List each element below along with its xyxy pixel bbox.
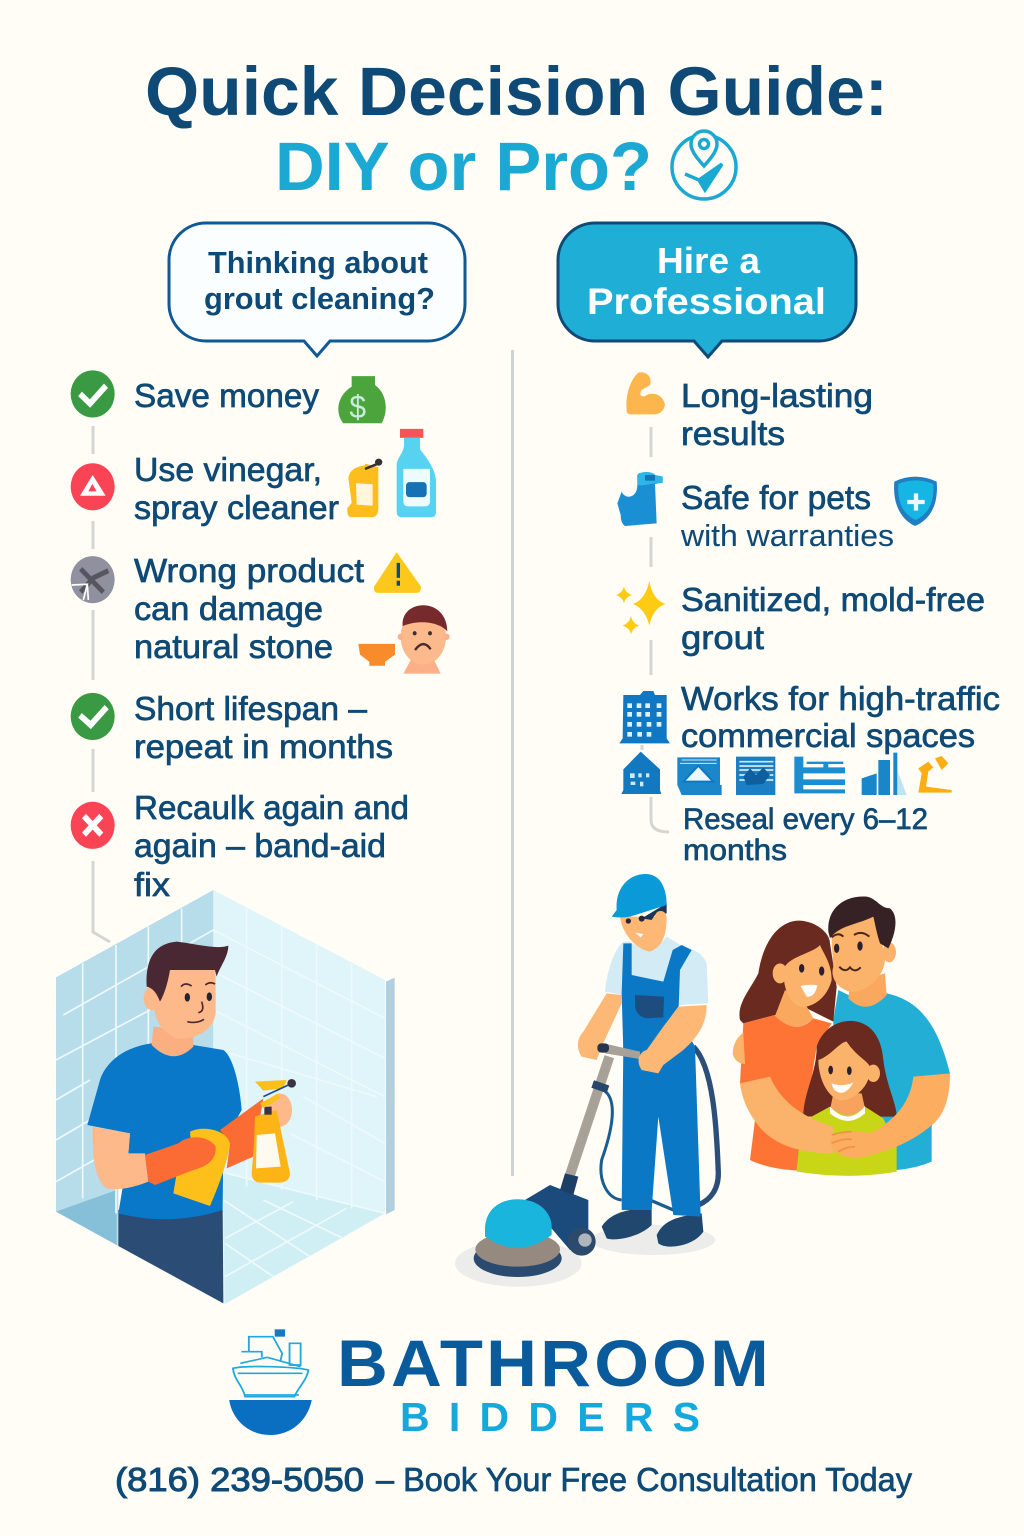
panel: pro list text: commercial spaces xyxy=(681,717,975,754)
illustration: happy family xyxy=(733,897,950,1176)
panel: pro list text: Reseal every 6–12 xyxy=(683,803,928,836)
panel: pro list text: months xyxy=(683,834,787,867)
panel: pro list connectors xyxy=(642,427,669,832)
speech bubble: thinking about grout cleaning: Thinking about xyxy=(208,245,428,280)
speech bubble: hire a professional: Hire a xyxy=(657,240,761,281)
panel: DIY list text xyxy=(134,377,409,903)
icon: worried face with brush xyxy=(358,605,450,674)
icon: office building xyxy=(619,691,670,743)
panel: DIY list text: Short lifespan – xyxy=(134,690,368,727)
icon: yellow bottle xyxy=(347,459,382,517)
panel: pro list text: Works for high-traffic xyxy=(681,680,1000,717)
footer: phone call to action xyxy=(115,1461,912,1498)
title: DIY or Pro? xyxy=(275,128,652,205)
icon: muscle arm xyxy=(626,372,665,414)
icon: blue dog xyxy=(617,472,663,526)
panel: DIY list text: fix xyxy=(134,866,171,903)
panel: DIY list icons xyxy=(71,370,450,849)
icon: shield xyxy=(894,477,937,526)
icon: green check xyxy=(71,693,115,740)
speech bubble: hire a professional xyxy=(558,223,856,357)
logo: bathroom bidders mark xyxy=(229,1329,312,1435)
panel: DIY list text: Recaulk again and xyxy=(134,789,409,826)
panel: DIY list text: repeat in months xyxy=(134,728,393,765)
panel: DIY list text: again – band-aid xyxy=(134,827,386,864)
panel: DIY list text: Save money xyxy=(134,377,320,414)
icon: warning triangle xyxy=(374,552,421,593)
panel: pro list text xyxy=(680,377,1000,867)
icon: money bag: $ xyxy=(349,389,366,425)
panel: pro list icons xyxy=(616,372,952,795)
panel: DIY list text: natural stone xyxy=(134,628,333,665)
icon: money bag xyxy=(338,376,386,425)
panel: DIY list text: Wrong product xyxy=(134,552,364,589)
speech bubble: thinking about grout cleaning xyxy=(169,223,465,356)
icon: red warning xyxy=(71,463,115,510)
panel: DIY list text: can damage xyxy=(134,590,323,627)
title xyxy=(145,53,888,205)
panel: pro list text: results xyxy=(681,415,785,452)
icon: red cross xyxy=(71,802,115,849)
panel: pro list text: Long-lasting xyxy=(681,377,873,414)
icon row: commercial spaces xyxy=(621,752,952,795)
logo: wordmark: BATHROOM xyxy=(337,1326,772,1400)
divider xyxy=(511,350,514,1176)
panel: DIY list text: Use vinegar, xyxy=(134,451,322,488)
footer: phone call to action: – Book Your Free Consultation Today xyxy=(376,1461,912,1498)
panel: DIY list connectors xyxy=(93,426,110,942)
icon: blue bottle xyxy=(397,429,436,517)
panel: pro list text: Sanitized, mold-free xyxy=(681,581,985,618)
illustration: professional with floor machine xyxy=(455,874,718,1287)
title: Quick Decision Guide: xyxy=(145,53,888,130)
icon: green check xyxy=(71,370,115,417)
icon: cracked grey tile xyxy=(71,556,115,603)
panel: pro list text: Safe for pets xyxy=(681,479,871,516)
panel: DIY list text: spray cleaner xyxy=(134,489,339,526)
man cleaning xyxy=(87,942,296,1303)
panel: pro list text: with warranties xyxy=(680,518,894,553)
speech bubble: thinking about grout cleaning: grout cleaning? xyxy=(204,281,435,316)
panel: shower tile wall illustration xyxy=(56,890,395,1304)
logo: wordmark xyxy=(337,1326,772,1440)
icon: location check xyxy=(672,131,736,199)
footer: phone call to action: (816) 239-5050 xyxy=(115,1461,364,1498)
panel: pro list text: grout xyxy=(681,619,764,656)
speech bubble: hire a professional: Professional xyxy=(587,281,826,322)
logo: wordmark: BIDDERS xyxy=(400,1394,700,1440)
icon: sparkles xyxy=(616,581,666,634)
